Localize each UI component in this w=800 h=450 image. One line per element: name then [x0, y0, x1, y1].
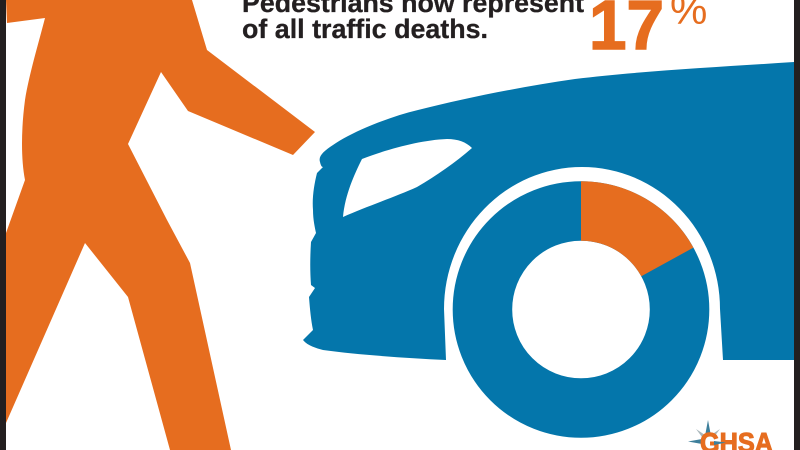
- pedestrian silhouette: [6, 0, 315, 450]
- icon: compass star: [688, 420, 720, 444]
- left border: [0, 0, 6, 450]
- icon: compass east arm: [714, 441, 726, 445]
- right border: [794, 0, 800, 450]
- big statistic: 17%: [589, 0, 707, 64]
- donut wedge: pedestrians: [581, 181, 693, 276]
- donut chart: 17 percent: [482, 181, 693, 408]
- headline text: [242, 0, 584, 44]
- car silhouette: [303, 62, 794, 360]
- headline text: of all traffic deaths.: [242, 14, 488, 44]
- donut ring: all traffic deaths: [482, 211, 680, 408]
- GHSA logo: [688, 420, 773, 450]
